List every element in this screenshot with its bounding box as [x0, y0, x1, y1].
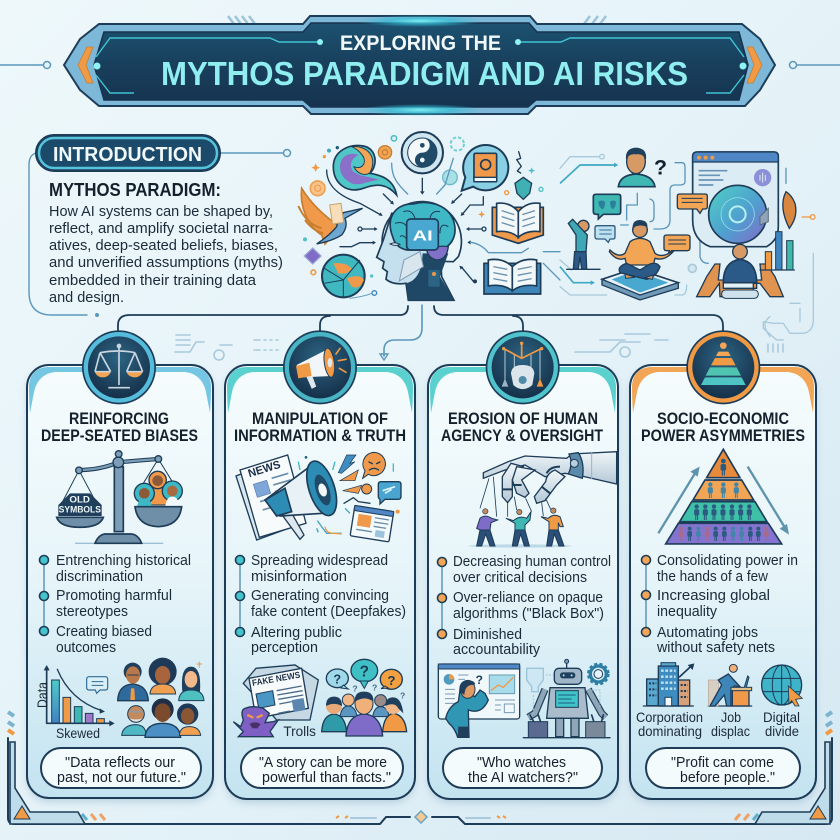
- icon: digital globe: [762, 665, 802, 706]
- icon: AI head: AI: [413, 229, 433, 245]
- icon: person at desk: [697, 244, 783, 298]
- icon: small motifs: [303, 136, 543, 275]
- icon: question bubbles: ?: [387, 673, 395, 688]
- bullet text: Generating convincing: [251, 587, 389, 604]
- icon: book speech bubble: [462, 145, 508, 191]
- icon captions: [636, 709, 800, 739]
- chart: skewed data: [34, 665, 115, 741]
- icon: bar chart: [760, 232, 794, 270]
- card heading: AGENCY & OVERSIGHT: [441, 426, 604, 445]
- icon: question bubbles: ?: [352, 684, 358, 694]
- card heading: MANIPULATION OF: [252, 409, 388, 428]
- puppet figures: [468, 508, 572, 548]
- introduction heading: MYTHOS PARADIGM:: [49, 179, 221, 200]
- icon: meditating person on platform: [602, 220, 678, 300]
- bullet text: [251, 552, 406, 656]
- card heading: [234, 409, 406, 445]
- timeline bullets: [642, 556, 650, 636]
- quote pill: "Profit can come: [671, 754, 774, 771]
- bullet text: discrimination: [56, 568, 143, 585]
- quote pill: past, not our future.": [57, 769, 186, 786]
- panel: card 4 power: [630, 330, 816, 803]
- quote pill: before people.": [680, 769, 775, 786]
- introduction body: [49, 203, 283, 306]
- icon: speech bubbles: [593, 194, 707, 254]
- bullet text: the hands of a few: [657, 568, 768, 585]
- icon: robot arm: [483, 452, 617, 503]
- card heading: DEEP-SEATED BIASES: [41, 426, 198, 445]
- bullet text: stereotypes: [56, 603, 128, 620]
- title text: [161, 32, 688, 92]
- icon: person viewing dashboard: [438, 664, 520, 737]
- icon: mythic bird: [298, 188, 363, 244]
- bullet text: Spreading widespread: [251, 552, 388, 569]
- icon: large megaphone: [265, 457, 342, 539]
- icon: pyramid badge: [686, 330, 760, 404]
- bullet text: Altering public: [251, 624, 342, 641]
- arrows into head: [327, 158, 560, 298]
- icon: question bubbles: ?: [372, 683, 377, 693]
- icon: fake news paper: FAKE NEWS: [251, 670, 301, 688]
- illustration: people and technology: [560, 148, 815, 340]
- bullet text: Increasing global: [657, 587, 770, 604]
- bullet text: Decreasing human control: [453, 553, 611, 570]
- timeline bullets: [236, 556, 244, 636]
- quote pill: "Who watches: [477, 754, 566, 771]
- card heading: SOCIO-ECONOMIC: [657, 409, 789, 428]
- icon: crowd: [322, 692, 407, 736]
- quote pill: powerful than facts.": [262, 769, 391, 786]
- introduction body: How AI systems can be shaped by,: [49, 203, 273, 220]
- card heading: EROSION OF HUMAN: [448, 409, 598, 428]
- bullet text: algorithms ("Black Box"): [453, 605, 604, 622]
- bullet text: outcomes: [56, 639, 116, 656]
- introduction body: reflect, and amplify societal narra-: [49, 220, 273, 237]
- bullet text: over critical decisions: [453, 569, 587, 586]
- icon captions: divide: [765, 723, 799, 739]
- bullet text: Creating biased: [56, 623, 152, 640]
- icon: person with question mark: [618, 148, 667, 187]
- bullet text: perception: [251, 639, 318, 656]
- icon: person viewing dashboard: ?: [476, 673, 483, 687]
- quote pill: [241, 748, 403, 788]
- icon: megaphone badge: [283, 330, 357, 404]
- bullet text: accountability: [453, 641, 540, 658]
- timeline bullets: [438, 558, 446, 638]
- illustration: dashboard viewer and robot: [438, 659, 610, 738]
- icon: standing person: [567, 219, 600, 269]
- card heading: POWER ASYMMETRIES: [641, 426, 805, 445]
- introduction pill: INTRODUCTION: [53, 144, 202, 166]
- icon: angry emoji and noise: [298, 452, 401, 534]
- icon captions: Job: [721, 709, 741, 725]
- connector lines from head to cards: [118, 305, 723, 360]
- panel: introduction: [29, 135, 290, 317]
- outer frame and decorative circuitry: [8, 334, 832, 824]
- title banner: [0, 15, 840, 116]
- icon captions: dominating: [638, 723, 702, 739]
- illustration: scale with old symbols and people: SYMBOLS: [59, 504, 101, 514]
- illustration: fake news, troll and confused crowd: [233, 659, 407, 739]
- icon: browser window: [350, 505, 394, 542]
- introduction body: atives, deep-seated beliefs, biases,: [49, 237, 278, 254]
- introduction body: embedded in their training data: [49, 272, 257, 289]
- illustration: corporation, job displacement, digital divide: [643, 663, 802, 706]
- icon: scales badge: [82, 330, 156, 404]
- bullet text: [656, 552, 798, 656]
- bullet text: Over-reliance on opaque: [453, 589, 603, 606]
- card heading: [641, 409, 805, 445]
- icon: question bubbles: ?: [333, 672, 341, 686]
- icon: job displacement: [708, 664, 752, 706]
- bullet text: Promoting harmful: [56, 587, 172, 604]
- bullet text: [453, 553, 611, 658]
- icon captions: Digital: [763, 709, 800, 725]
- introduction pill: [36, 135, 220, 171]
- illustration: scale with old symbols and people: OLD: [69, 494, 91, 504]
- icon: yin yang: [402, 132, 443, 173]
- quote pill: [443, 748, 602, 788]
- bullet text: Consolidating power in: [657, 552, 798, 569]
- icon: swirl wave: [333, 146, 397, 195]
- icon: newspaper: [236, 455, 306, 540]
- quote pill: "Data reflects our: [65, 754, 175, 771]
- illustration: AI head with myths: [298, 132, 560, 300]
- quote pill: [646, 748, 800, 788]
- bullet text: Entrenching historical: [56, 552, 191, 569]
- icon: question bubbles: ?: [400, 690, 405, 700]
- panel: card 1 biases: [27, 330, 213, 802]
- title text: EXPLORING THE: [340, 32, 501, 55]
- title text: MYTHOS PARADIGM AND AI RISKS: [161, 55, 688, 92]
- chart: skewed data: Data: [34, 682, 50, 708]
- icon: corporate buildings: [643, 663, 694, 706]
- bullet text: fake content (Deepfakes): [251, 603, 406, 620]
- icon: newspaper: NEWS: [247, 459, 282, 480]
- icon: robot: [523, 659, 610, 738]
- strings: [480, 477, 551, 517]
- illustration: robot hand puppeteer: [468, 452, 617, 548]
- card heading: [441, 409, 604, 445]
- icon: question bubbles: ?: [360, 664, 369, 681]
- icon: orange leaf and pin: [783, 192, 815, 228]
- illustration: social pyramid: [658, 449, 789, 544]
- introduction body: and unverified assumptions (myths): [49, 254, 283, 271]
- panel: card 2 manipulation: [225, 330, 415, 803]
- trolls label: Trolls: [283, 723, 316, 739]
- card heading: REINFORCING: [69, 409, 169, 428]
- card heading: INFORMATION & TRUTH: [234, 426, 406, 445]
- illustration: news and megaphone: [236, 452, 401, 542]
- icon: AI head: [377, 202, 461, 300]
- panel: card 3 erosion: [428, 330, 618, 803]
- card heading: [41, 409, 198, 445]
- icon: open book blue: [484, 259, 541, 294]
- icon: fake news paper: [243, 665, 318, 720]
- quote pill: [41, 748, 201, 788]
- icon: gear: [588, 664, 608, 684]
- icon captions: Corporation: [636, 709, 703, 725]
- timeline bullets: [40, 556, 48, 636]
- bullet text: inequality: [657, 603, 717, 620]
- illustration: scale with old symbols and people: [57, 451, 182, 543]
- quote pill: the AI watchers?": [468, 769, 578, 786]
- icon: website with orb: [693, 152, 778, 247]
- introduction body: and design.: [49, 289, 124, 306]
- bullet text: Automating jobs: [657, 624, 758, 641]
- bullet text: [56, 552, 191, 656]
- icon: open book orange: [492, 203, 543, 243]
- bullet text: Diminished: [453, 626, 522, 643]
- bullet text: without safety nets: [656, 639, 775, 656]
- icon: puppet control badge: [486, 330, 560, 404]
- icon captions: displac: [711, 723, 750, 739]
- circuit traces: [560, 154, 813, 340]
- icon: group of diverse people: [118, 658, 204, 737]
- chart: skewed data: Skewed: [56, 725, 100, 741]
- icon: question bubbles: [326, 659, 405, 700]
- bullet text: misinformation: [251, 568, 347, 585]
- icon: troll: [233, 707, 278, 737]
- icon: person with question mark: ?: [654, 155, 667, 179]
- icon: globe: [322, 255, 365, 297]
- quote pill: "A story can be more: [259, 754, 387, 771]
